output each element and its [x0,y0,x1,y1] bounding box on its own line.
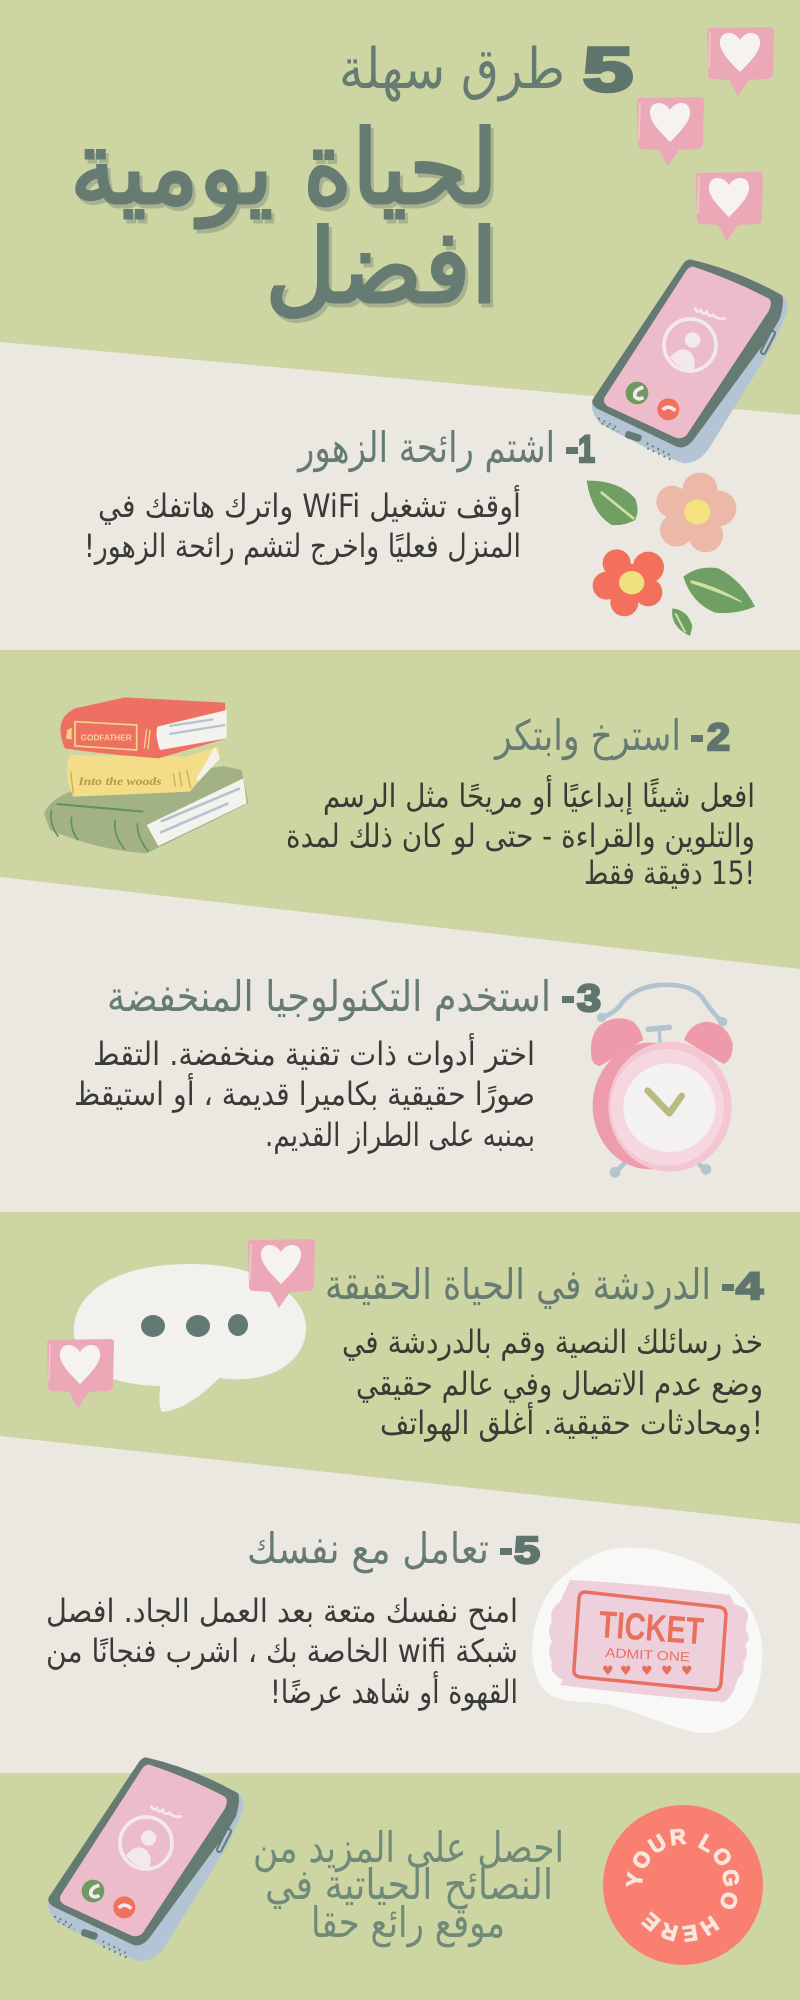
main title shadow: لحياة يومية [73,113,501,232]
footer call to action: النصائح الحياتية في [265,1860,553,1910]
section 2 heading: 2 [707,717,730,759]
icon: heart bubble [696,172,763,241]
icon: alarm clock [591,985,733,1178]
icon: flowers and leaves [587,473,755,636]
section 1 text [84,485,521,565]
section 3 text: صورًا حقيقية بكاميرا قديمة ، أو استيقظ [74,1073,535,1113]
footer call to action: موقع رائع حقا [311,1898,505,1948]
main title: افضل [265,208,498,327]
section 1 heading: 1 [578,429,595,471]
footer call to action: احصل على المزيد من [253,1823,564,1872]
logo badge [603,1805,763,1965]
section 3 text: بمنبه على الطراز القديم. [265,1116,535,1154]
icon: ticket on white blob [532,1548,762,1733]
section 2 text [286,775,755,892]
main title [70,109,498,327]
icon: phone [48,1757,243,1961]
icon: stack of books: GODFATHER [81,733,132,743]
section 2 text: !15 دقيقة فقط [584,854,755,892]
section 1 heading: اشتم رائحة الزهور [296,423,555,473]
section 5 heading: تعامل مع نفسك [247,1524,489,1574]
subtitle number 5: 5 [583,36,633,105]
section 5 text [46,1592,518,1711]
icon: heart bubble [248,1239,315,1308]
section 3 text: اختر أدوات ذات تقنية منخفضة. التقط [93,1033,535,1073]
section 1 text: أوقف تشغيل WiFi واترك هاتفك في [98,485,521,525]
icon: heart bubble [707,27,774,96]
icon: stack of books [44,697,248,853]
main title shadow: افضل [268,212,501,331]
icon: ticket on white blob: ♥♥♥♥♥ [602,1664,693,1679]
section 4 text: !ومحادثات حقيقية. أغلق الهواتف [380,1402,763,1442]
section 5 heading: 5 [514,1530,540,1572]
section 3 text [74,1033,535,1154]
logo badge: YOUR LOGO HERE [626,1828,740,1942]
section 5 text: القهوة أو شاهد عرضًا! [270,1671,518,1711]
section 1 text: المنزل فعليًا واخرج لتشم رائحة الزهور! [84,527,521,565]
icon: heart bubble [47,1339,114,1408]
section 4 heading: 4 [736,1266,763,1308]
icon: phone [592,259,787,463]
footer call to action [253,1823,564,1948]
icon: stack of books: Into the woods [77,774,162,788]
title block [70,36,633,331]
section 4 heading: الدردشة في الحياة الحقيقة [325,1260,711,1310]
section 5 text: امنح نفسك متعة بعد العمل الجاد. افصل [46,1592,518,1630]
icon: chat bubble [74,1264,306,1412]
section 3 heading: 3 [577,978,601,1020]
section 5 text: شبكة wifi الخاصة بك ، اشرب فنجانًا من [46,1632,518,1670]
subtitle: طرق سهلة [339,37,565,102]
section 4 text [342,1323,763,1442]
icon: heart bubble [637,97,704,166]
icon: ticket on white blob: TICKET [597,1604,705,1653]
main title: لحياة يومية [70,109,498,228]
section 2 heading: استرخ وابتكر [493,711,681,760]
icon: ticket on white blob: ADMIT ONE [605,1645,691,1664]
main title shadow [73,113,501,331]
section 3 heading: استخدم التكنولوجيا المنخفضة [107,972,551,1021]
